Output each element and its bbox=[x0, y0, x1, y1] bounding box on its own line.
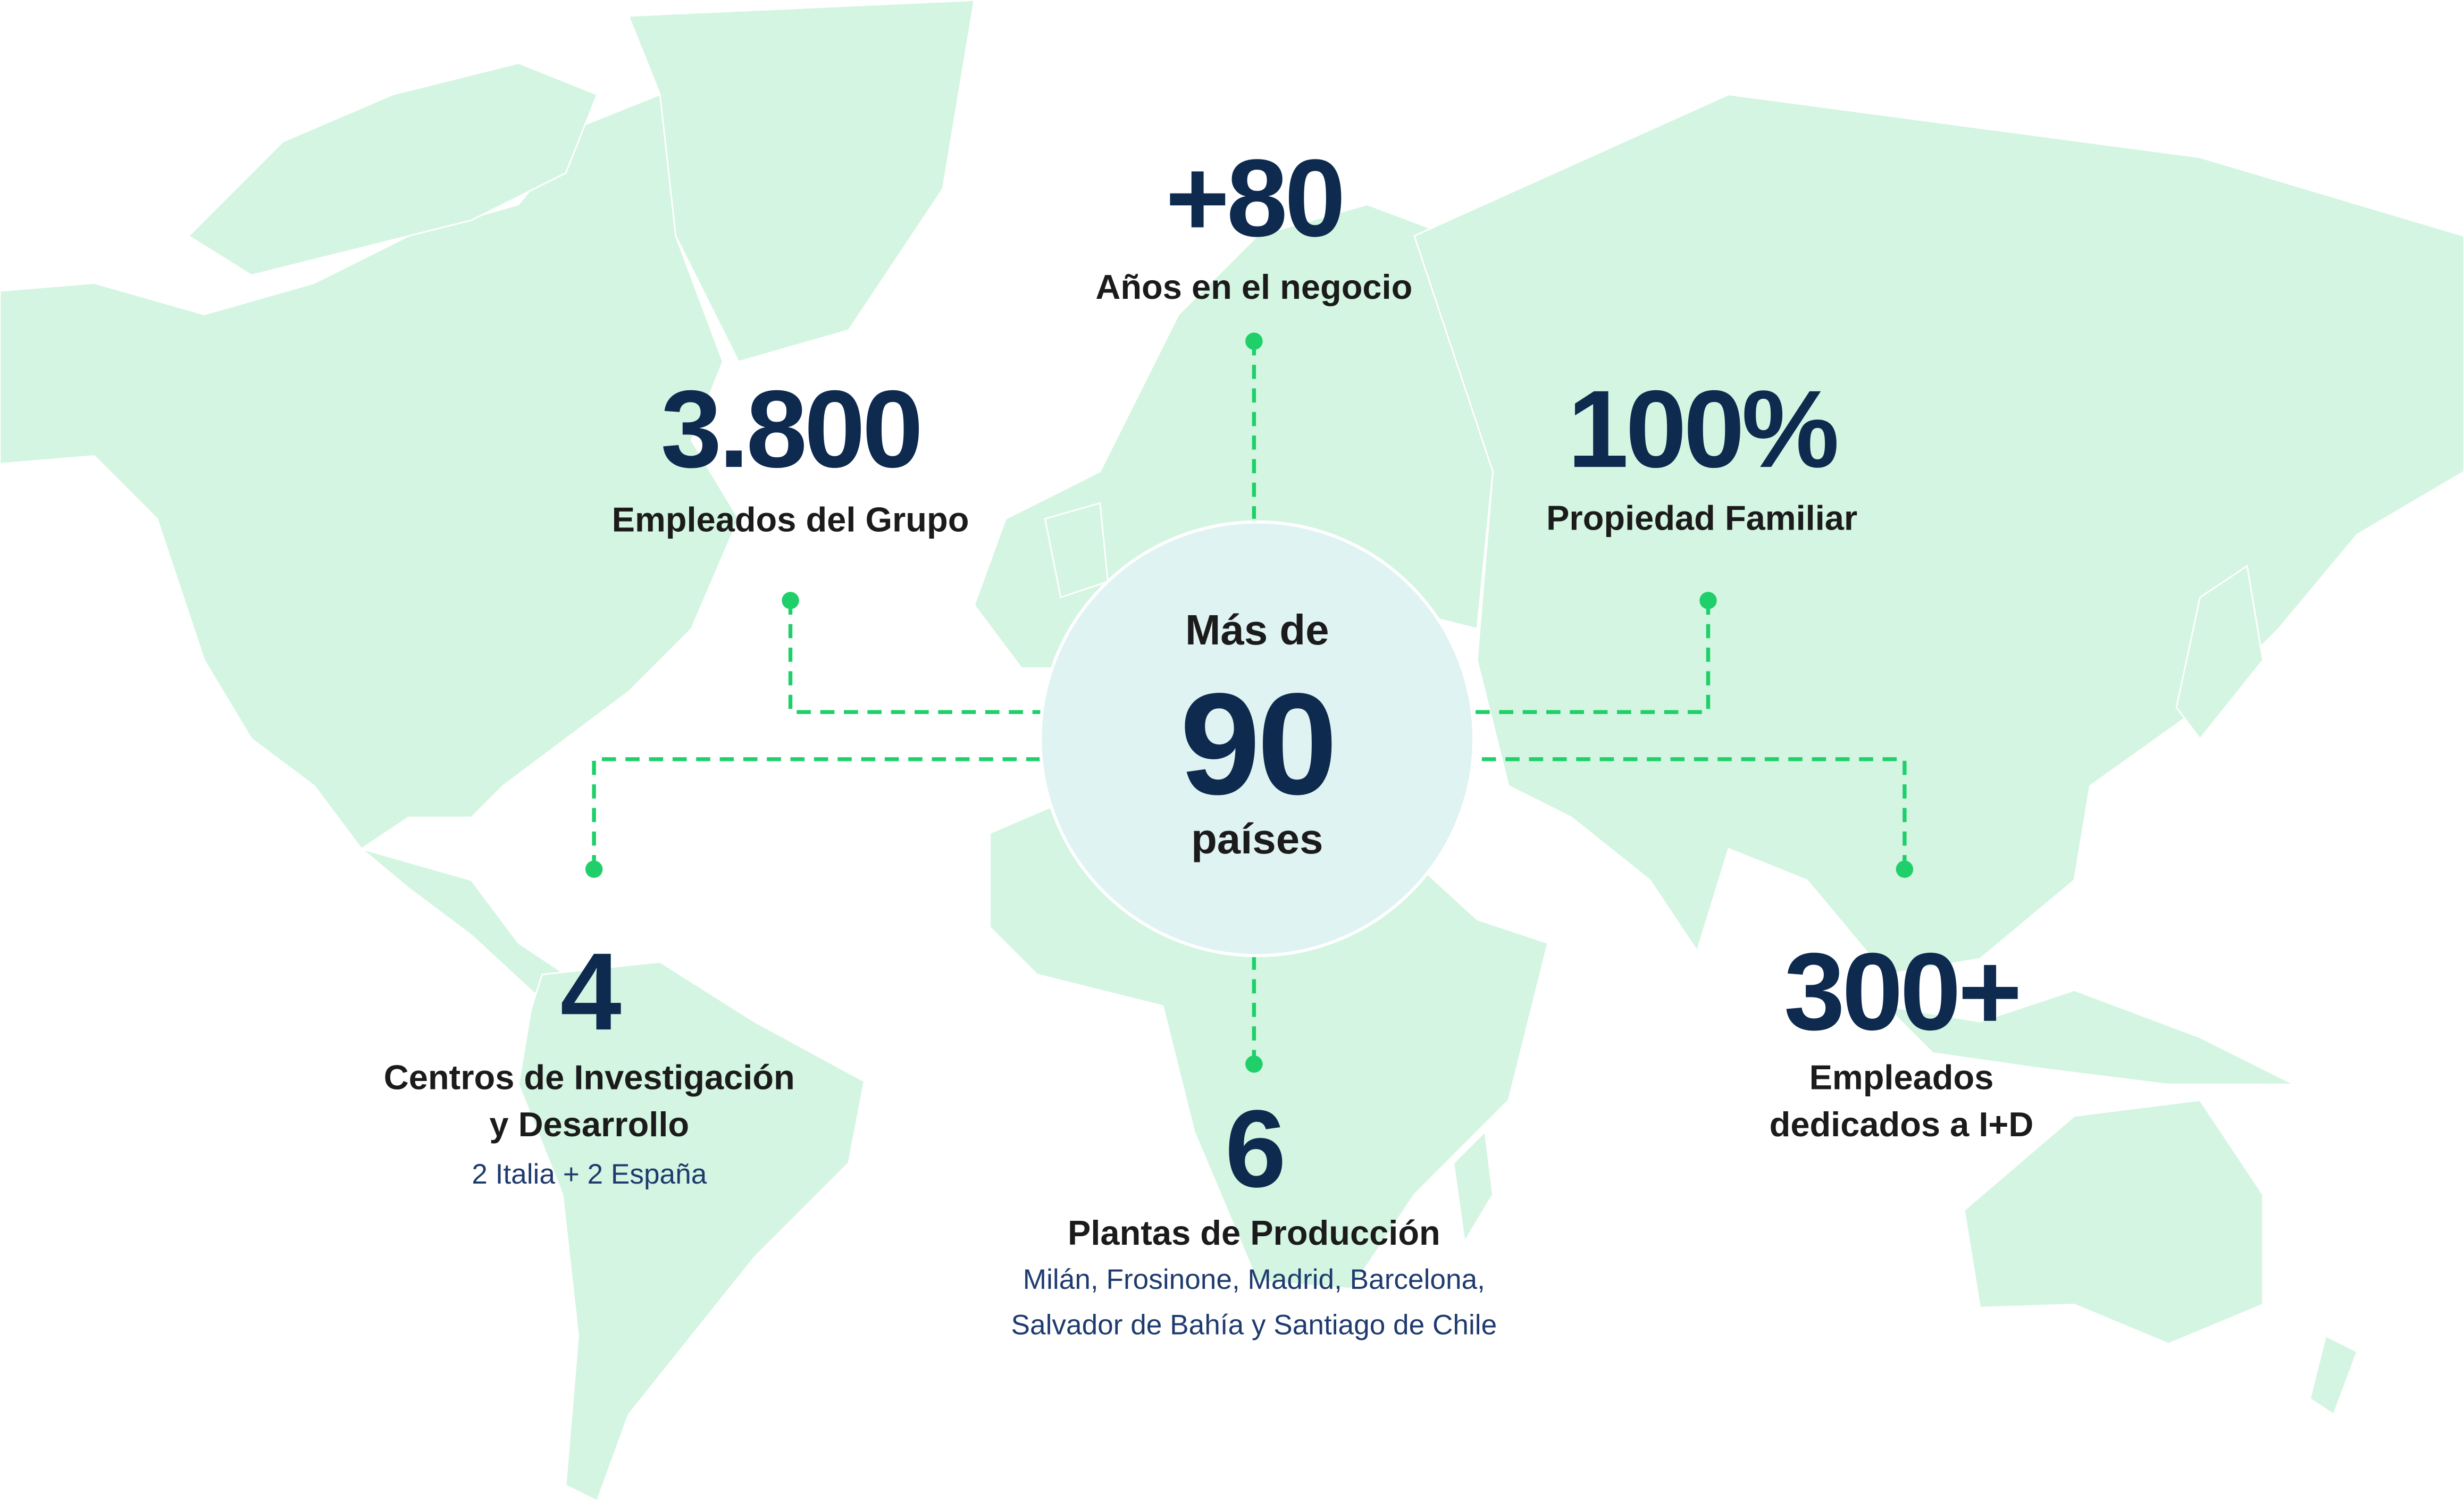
stat: R&D employees bbox=[1770, 930, 2033, 1144]
new zealand bbox=[2310, 1336, 2357, 1414]
uk bbox=[1045, 503, 1108, 597]
north america bbox=[0, 95, 739, 849]
stat: employees: 3.800 bbox=[660, 367, 920, 490]
asia bbox=[1414, 95, 2464, 975]
stat: plants bbox=[1011, 1087, 1497, 1341]
stat: R&D centers: Centros de Investigación bbox=[384, 1058, 795, 1096]
stat: family ownership: Propiedad Familiar bbox=[1546, 498, 1857, 537]
stat: years: Años en el negocio bbox=[1095, 267, 1412, 306]
stat: plants: 6 bbox=[1225, 1087, 1283, 1210]
stat: years bbox=[1095, 137, 1412, 306]
stat: R&D centers: 4 bbox=[560, 930, 621, 1053]
greenland bbox=[628, 0, 974, 362]
stat: family ownership: 100% bbox=[1568, 367, 1837, 490]
japan bbox=[2176, 566, 2263, 739]
indonesia bbox=[1885, 990, 2294, 1085]
connector lines bbox=[585, 332, 1913, 1072]
stat: R&D centers bbox=[384, 930, 795, 1190]
center circle: countries: Más de bbox=[1185, 606, 1329, 653]
africa bbox=[990, 786, 1548, 1289]
stat: plants: Plantas de Producción bbox=[1068, 1213, 1440, 1252]
stat: plants: Salvador de Bahía y Santiago de Chile bbox=[1011, 1310, 1497, 1341]
stat: R&D employees: 300+ bbox=[1784, 930, 2019, 1053]
stat: family ownership bbox=[1546, 367, 1857, 537]
stat: years: +80 bbox=[1166, 137, 1343, 259]
madagascar bbox=[1454, 1131, 1493, 1242]
arctic islands bbox=[189, 63, 597, 275]
central america bbox=[362, 849, 566, 993]
europe bbox=[974, 205, 1493, 668]
stat: employees bbox=[612, 367, 969, 539]
south america bbox=[518, 962, 864, 1501]
stat: plants: Milán, Frosinone, Madrid, Barcelona, bbox=[1023, 1264, 1485, 1295]
center circle: countries: países bbox=[1191, 815, 1323, 862]
center circle: countries bbox=[1040, 522, 1474, 955]
stat: R&D employees: dedicados a I+D bbox=[1770, 1105, 2033, 1144]
stat: employees: Empleados del Grupo bbox=[612, 500, 969, 539]
stat: R&D employees: Empleados bbox=[1809, 1058, 1993, 1096]
australia bbox=[1964, 1100, 2263, 1344]
stat: R&D centers: y Desarrollo bbox=[489, 1105, 689, 1144]
center circle: countries: 90 bbox=[1180, 663, 1335, 825]
stat: R&D centers: 2 Italia + 2 España bbox=[472, 1159, 707, 1190]
